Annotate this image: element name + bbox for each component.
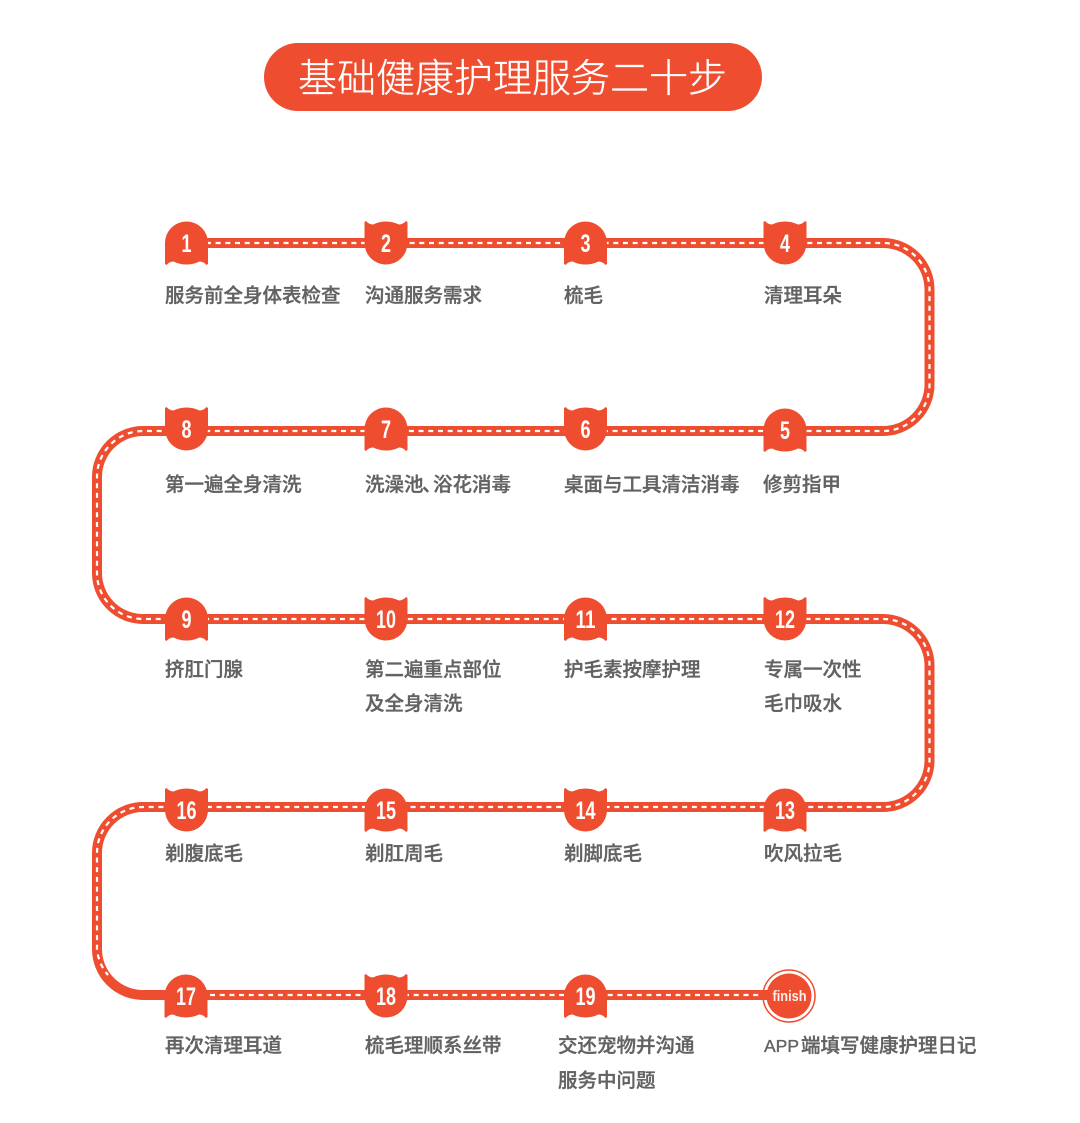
step 1: 1 <box>182 230 192 258</box>
step 10: 第二遍重点部位 <box>365 659 502 681</box>
finish step <box>763 970 977 1057</box>
step 2: 2 <box>381 230 391 258</box>
step 5: 5 <box>780 417 790 445</box>
step 9 <box>165 598 244 681</box>
step 10: 10 <box>376 606 396 634</box>
step 8: 8 <box>182 416 192 444</box>
step 6 <box>564 407 740 496</box>
step 7: 、 <box>422 474 442 496</box>
step 2 <box>364 221 482 307</box>
step 13: 13 <box>775 797 795 825</box>
step 6: 桌面与工具清洁消毒 <box>564 474 740 496</box>
step 15: 15 <box>376 797 396 825</box>
step 18 <box>364 974 502 1057</box>
finish step: 端填写健康护理日记 <box>801 1035 977 1057</box>
step 18: 梳毛理顺系丝带 <box>365 1035 502 1057</box>
step 9: 9 <box>182 606 192 634</box>
step 7: 7 <box>381 416 391 444</box>
step 12 <box>764 597 862 715</box>
step 17: 17 <box>176 983 196 1011</box>
step 18: 18 <box>376 983 396 1011</box>
step 15 <box>364 788 443 865</box>
step 8 <box>165 407 302 496</box>
step 12: 毛巾吸水 <box>764 693 843 715</box>
step 3: 梳毛 <box>564 285 603 307</box>
step 6: 6 <box>580 416 590 444</box>
title pill: 基础健康护理服务二十步 <box>298 58 727 101</box>
step 13 <box>764 788 842 865</box>
finish step: finish <box>772 989 806 1005</box>
winding track <box>97 243 930 995</box>
step 19: 交还宠物并沟通 <box>558 1035 695 1057</box>
step 10 <box>364 597 502 715</box>
step 5 <box>763 408 841 496</box>
step 7 <box>364 408 511 496</box>
step 15: 剃肛周毛 <box>365 843 443 865</box>
step 11: 护毛素按摩护理 <box>564 659 701 681</box>
step 13: 吹风拉毛 <box>764 843 842 865</box>
step 11: 11 <box>576 606 596 634</box>
step 4 <box>764 221 842 307</box>
step 17 <box>164 974 282 1057</box>
step 1: 服务前全身体表检查 <box>165 285 341 307</box>
step 1 <box>165 222 341 307</box>
step 4: 4 <box>780 230 790 258</box>
step 19: 19 <box>576 983 596 1011</box>
step 9: 挤肛门腺 <box>165 659 244 681</box>
step 5: 修剪指甲 <box>763 474 841 496</box>
step 11 <box>564 598 701 681</box>
step 14: 14 <box>576 797 596 825</box>
step 12: 12 <box>775 606 795 634</box>
step 14: 剃脚底毛 <box>564 843 642 865</box>
step 19 <box>558 974 695 1092</box>
step 16: 剃腹底毛 <box>165 843 243 865</box>
step 17: 再次清理耳道 <box>165 1035 282 1057</box>
step 19: 服务中问题 <box>558 1070 656 1092</box>
step 14 <box>564 788 642 865</box>
step 7: 洗澡池 <box>365 474 424 496</box>
step 12: 专属一次性 <box>764 659 862 681</box>
step 3: 3 <box>580 230 590 258</box>
step 10: 及全身清洗 <box>365 693 463 715</box>
title pill <box>264 43 762 111</box>
finish step: APP <box>764 1036 799 1056</box>
step 16: 16 <box>176 797 196 825</box>
step 16 <box>165 788 243 865</box>
step 7: 浴花消毒 <box>433 474 511 496</box>
step 3 <box>564 222 607 307</box>
step 4: 清理耳朵 <box>764 285 842 307</box>
step 8: 第一遍全身清洗 <box>165 474 302 496</box>
step 2: 沟通服务需求 <box>365 285 482 307</box>
